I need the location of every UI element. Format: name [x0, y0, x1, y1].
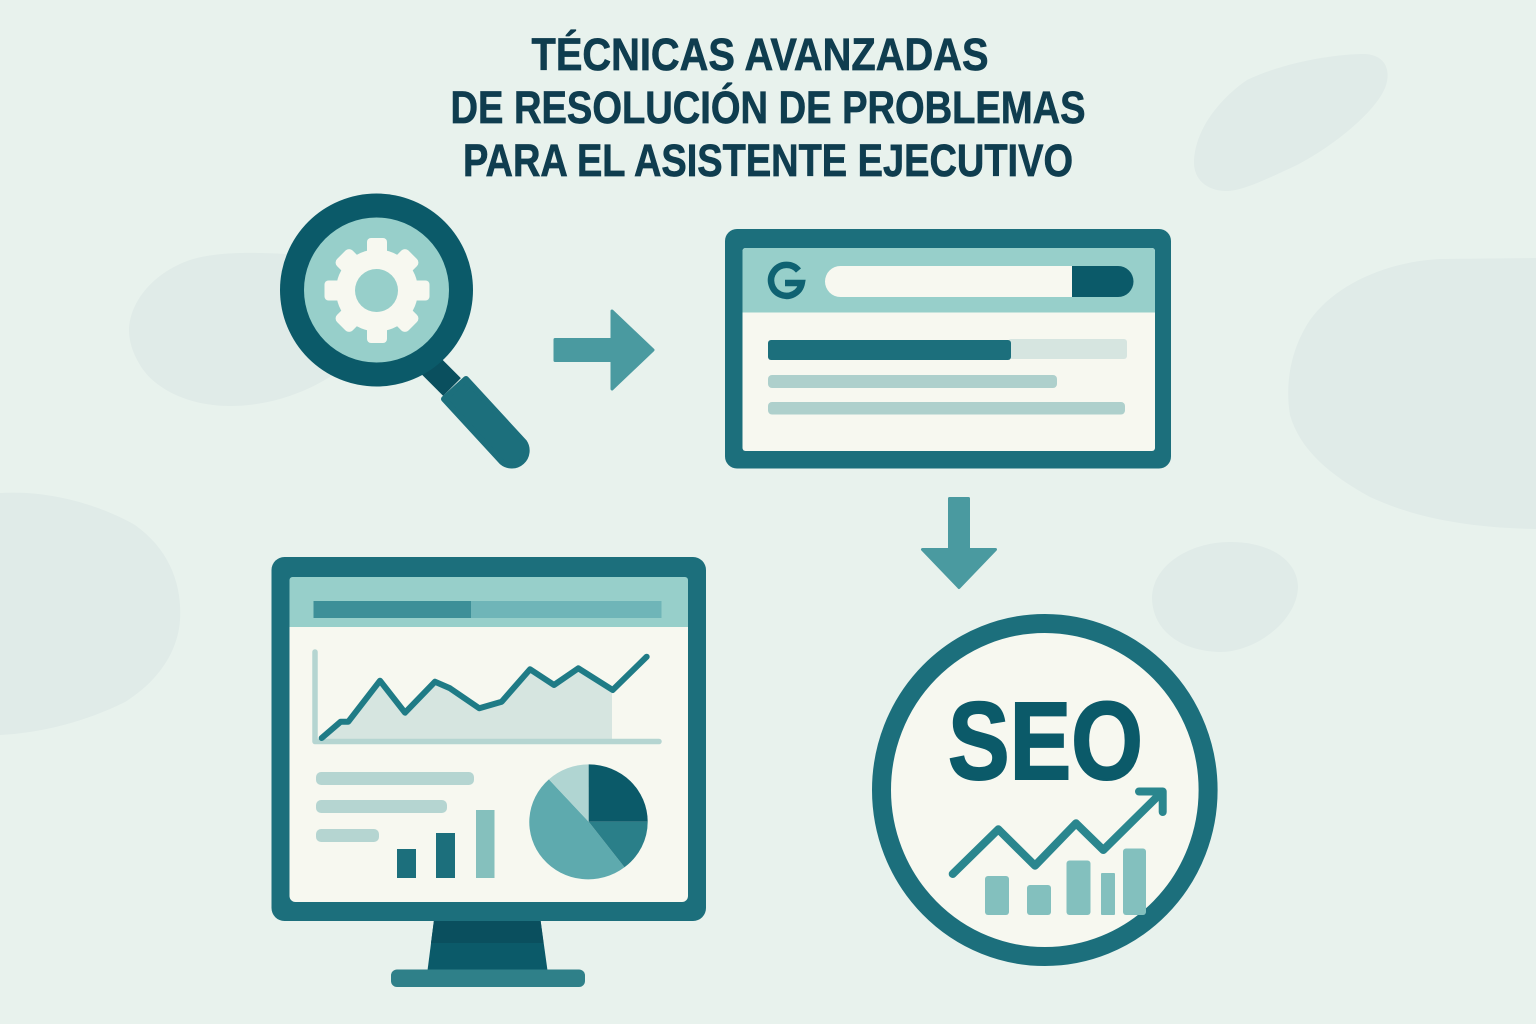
browser header — [742, 248, 1155, 312]
dashboard header — [290, 577, 688, 627]
badge circle — [882, 624, 1208, 956]
small bars — [985, 848, 1146, 915]
text placeholder lines — [316, 772, 474, 842]
rising trend arrow — [953, 792, 1163, 874]
line chart — [315, 652, 659, 742]
icon: G logo — [771, 265, 802, 296]
bar chart — [397, 810, 494, 878]
gear — [324, 238, 430, 343]
magnifier ring — [280, 194, 473, 386]
title: TÉCNICAS AVANZADAS — [532, 29, 988, 80]
arrow: right — [555, 311, 653, 389]
arrow: down — [922, 498, 996, 588]
pie chart — [529, 764, 648, 879]
monitor screen — [290, 577, 688, 902]
monitor stand — [391, 920, 585, 987]
icon: magnifying glass with gear — [280, 194, 527, 466]
search bar — [825, 266, 1134, 297]
search results — [768, 339, 1127, 414]
magnifier handle — [444, 379, 527, 466]
magnifier neck — [425, 360, 452, 387]
magnifier lens — [304, 218, 449, 362]
title: PARA EL ASISTENTE EJECUTIVO — [463, 135, 1073, 186]
SEO label: SEO — [948, 680, 1143, 803]
panel: search engine browser window — [725, 229, 1171, 468]
title: DE RESOLUCIÓN DE PROBLEMAS — [450, 82, 1086, 133]
panel: analytics monitor — [272, 557, 706, 987]
panel: SEO badge — [882, 624, 1208, 956]
title — [450, 29, 1086, 186]
monitor frame — [272, 557, 706, 921]
